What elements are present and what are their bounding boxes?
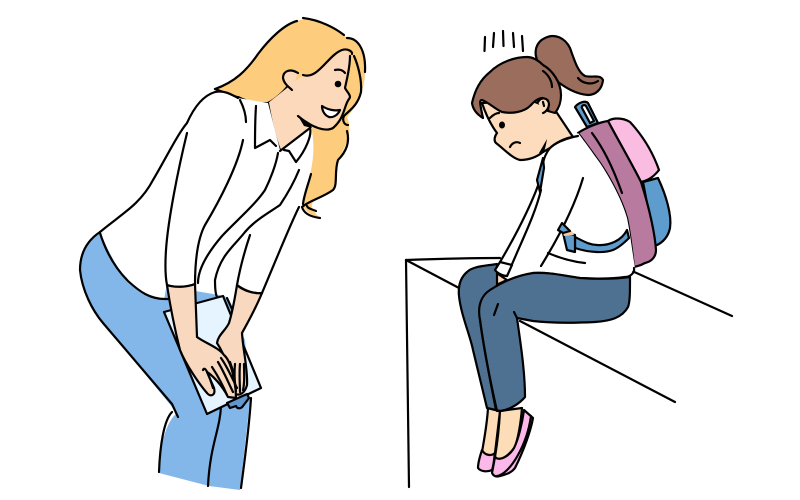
backpack pink flap xyxy=(608,118,659,182)
woman smile xyxy=(322,106,340,117)
girl head xyxy=(472,36,603,160)
woman figure xyxy=(80,18,365,490)
girl mouth xyxy=(510,142,520,147)
stress marks xyxy=(484,31,523,51)
back foot xyxy=(482,408,500,455)
woman hair xyxy=(215,18,365,218)
girl ponytail xyxy=(536,36,603,95)
woman face and neck xyxy=(268,49,352,150)
woman eye xyxy=(335,81,341,87)
woman jeans xyxy=(80,232,251,490)
backpack xyxy=(575,102,670,267)
back leg xyxy=(459,264,515,411)
left hand xyxy=(167,284,236,398)
shirt collar xyxy=(240,100,246,122)
fingers xyxy=(203,369,213,388)
girl face and neck xyxy=(482,100,573,160)
backpack loop xyxy=(575,102,598,127)
backpack blue body xyxy=(643,178,670,246)
front leg xyxy=(479,273,630,411)
girl torso and arm xyxy=(495,133,635,279)
girl ear xyxy=(538,98,549,113)
shirt placket and sleeve folds xyxy=(198,153,278,283)
jeans cuff tab xyxy=(227,394,249,408)
right hand xyxy=(217,285,262,395)
woman ear xyxy=(283,71,298,90)
girl figure xyxy=(459,31,670,477)
girl eye xyxy=(499,122,505,128)
front foot xyxy=(495,408,522,459)
woman shirt xyxy=(100,92,311,320)
front shoe xyxy=(492,410,533,477)
girl legs and feet xyxy=(459,264,630,477)
girl hair cap xyxy=(472,57,561,118)
bench xyxy=(406,258,732,487)
girl sleeve cuff xyxy=(495,262,512,276)
backpack waist belt xyxy=(575,230,629,252)
woman hands and arms xyxy=(167,284,262,408)
back shoe xyxy=(478,450,495,471)
girl hand on knee xyxy=(492,272,507,287)
girl blue strap xyxy=(537,158,544,192)
clipboard xyxy=(164,296,261,414)
backpack purple panel xyxy=(578,121,656,267)
